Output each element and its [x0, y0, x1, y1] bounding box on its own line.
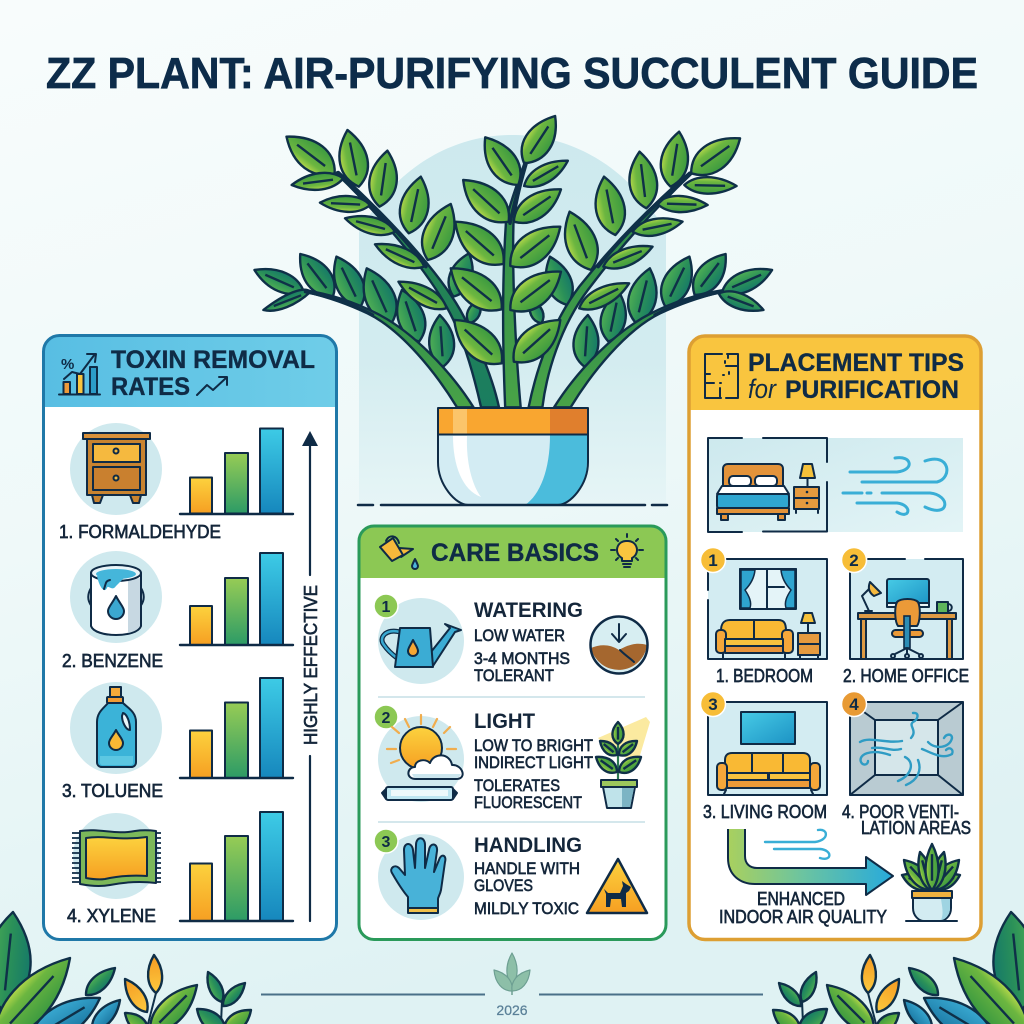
row: formaldehyde: [59, 423, 293, 542]
badge 3: 3: [382, 834, 391, 851]
label: highly effective: HIGHLY EFFECTIVE: [301, 585, 321, 745]
room 3: living room: [700, 692, 827, 795]
label: bedroom: 1. BEDROOM: [716, 666, 813, 686]
room outline: [708, 438, 827, 532]
text: light notes: FLUORESCENT: [474, 793, 582, 812]
bar chart: [180, 553, 293, 645]
text: light notes: [474, 736, 593, 812]
heading: toxin removal rates: RATES: [111, 373, 190, 401]
badge 2: [374, 705, 398, 729]
row: xylene: [67, 812, 293, 926]
icon: watering can: [382, 624, 461, 667]
label: 2. BENZENE: [62, 651, 163, 671]
toxin header band: [44, 336, 336, 407]
arrow: to cleaner air: [728, 829, 893, 895]
plant illustration: [250, 109, 776, 505]
shelf line: [358, 504, 667, 506]
row: benzene: [62, 551, 293, 671]
panel: toxin removal rates: [44, 336, 336, 940]
bar chart: [180, 678, 293, 778]
icon: bed: [717, 464, 789, 520]
icon: floor plan: [705, 354, 738, 398]
row: handling: [374, 829, 647, 920]
label: 1. FORMALDEHYDE: [59, 522, 221, 542]
arrow: effectiveness: [301, 431, 321, 921]
divider: [378, 696, 645, 698]
divider: [378, 821, 645, 823]
heading: care basics: CARE BASICS: [431, 539, 599, 567]
icon: glove: [391, 838, 445, 913]
heading: handling: HANDLING: [474, 834, 582, 857]
icon: nightstand: [798, 613, 820, 659]
icon: potted seedling in light beam: [593, 717, 650, 808]
heading: placement tips: [748, 349, 964, 404]
text: light notes: LOW TO BRIGHT: [474, 736, 593, 755]
room 4: poor ventilation: [842, 692, 963, 795]
icon: soil: [590, 616, 648, 674]
heading: placement tips: PLACEMENT TIPS: [748, 349, 964, 377]
icon: desk lamp: [862, 582, 881, 611]
icon: breeze: [765, 830, 829, 859]
icon: desk: [858, 613, 956, 659]
icon: pet warning triangle: [587, 859, 647, 913]
label: poor ventilation areas: LATION AREAS: [861, 818, 971, 838]
icon: trend line: [197, 377, 227, 395]
text: handling notes: GLOVES: [474, 876, 533, 895]
icon: bottle: [97, 687, 136, 767]
icon: light bulb: [611, 534, 643, 567]
label: 3. TOLUENE: [62, 781, 163, 801]
icon: monitor: [887, 579, 929, 607]
heading: placement tips: PURIFICATION: [785, 376, 959, 404]
icon: sprig: [490, 953, 534, 995]
icon: rug: [72, 830, 161, 886]
icon: paint can: [88, 565, 144, 635]
icon: mug: [937, 602, 952, 613]
pot: [438, 408, 588, 505]
leaves and stems: [250, 109, 776, 407]
text: enhanced air quality: INDOOR AIR QUALITY: [719, 907, 887, 927]
icon: window: [740, 569, 796, 609]
corner foliage: right: [768, 910, 1024, 1024]
text: enhanced air quality: [719, 889, 887, 927]
icon: sofa: [716, 620, 793, 658]
icon: chart with percent: [59, 354, 100, 394]
text: handling notes: MILDLY TOXIC: [474, 899, 579, 918]
label: poor ventilation areas: [842, 802, 971, 838]
title: ZZ PLANT: AIR-PURIFYING SUCCULENT GUIDE: [46, 50, 978, 98]
row: watering: [374, 594, 648, 685]
badge 1: 1: [382, 599, 391, 616]
text: watering notes: TOLERANT: [474, 666, 554, 685]
room 2: home office: [842, 548, 963, 659]
text: light notes: INDIRECT LIGHT: [474, 753, 593, 772]
text: handling notes: HANDLE WITH: [474, 859, 580, 878]
corner foliage: left: [0, 910, 256, 1024]
bar chart: [180, 812, 293, 921]
label: home office: 2. HOME OFFICE: [843, 666, 969, 686]
heading: toxin removal rates: TOXIN REMOVAL: [111, 346, 315, 374]
icon: potted plant: [898, 844, 965, 921]
icon: watering can: [380, 536, 418, 569]
placement header band: [689, 336, 981, 410]
arch backdrop: [359, 135, 666, 505]
text: watering notes: LOW WATER: [474, 626, 565, 645]
bar chart: [180, 428, 293, 514]
badge 3: 3: [708, 695, 718, 714]
footer: [261, 953, 763, 1018]
badge 4: 4: [849, 695, 859, 714]
room 1: bedroom: [700, 548, 827, 659]
panel: placement tips: [689, 336, 981, 940]
icon: dresser: [83, 433, 150, 503]
scene: bedroom airflow: [708, 438, 963, 532]
badge 3: [374, 829, 398, 853]
icon: stale air swirls: [860, 713, 953, 785]
badge 2: 2: [849, 551, 859, 570]
badge 2: 2: [382, 710, 391, 727]
heading: light: LIGHT: [474, 710, 535, 733]
icon: sun, cloud and tube: [382, 715, 463, 800]
icon: tv: [741, 712, 795, 744]
text: handling notes: [474, 859, 580, 918]
text: enhanced air quality: ENHANCED: [757, 889, 845, 909]
icon: office chair: [891, 599, 923, 658]
icon: sofa: [717, 753, 820, 794]
heading: toxin removal rates: [111, 346, 315, 401]
row: toluene: [62, 678, 293, 801]
icon: airflow: [843, 458, 947, 514]
badge 1: 1: [708, 551, 718, 570]
text: watering notes: 3-4 MONTHS: [474, 649, 570, 668]
label: living room: 3. LIVING ROOM: [703, 802, 827, 822]
icon: nightstand with lamp: [794, 464, 819, 513]
label: poor ventilation areas: 4. POOR VENTI-: [842, 802, 959, 822]
row: light: [374, 705, 650, 812]
panel: care basics: [359, 526, 666, 940]
text: watering notes: [474, 626, 570, 685]
icon: chart with percent: %: [61, 356, 74, 373]
heading: watering: WATERING: [474, 599, 583, 622]
text: light notes: TOLERATES: [474, 776, 560, 795]
label: 4. XYLENE: [67, 906, 156, 926]
heading: placement tips: for: [748, 374, 777, 404]
year: 2026: [496, 1002, 528, 1018]
care header band: [359, 526, 666, 578]
badge 1: [374, 594, 398, 618]
